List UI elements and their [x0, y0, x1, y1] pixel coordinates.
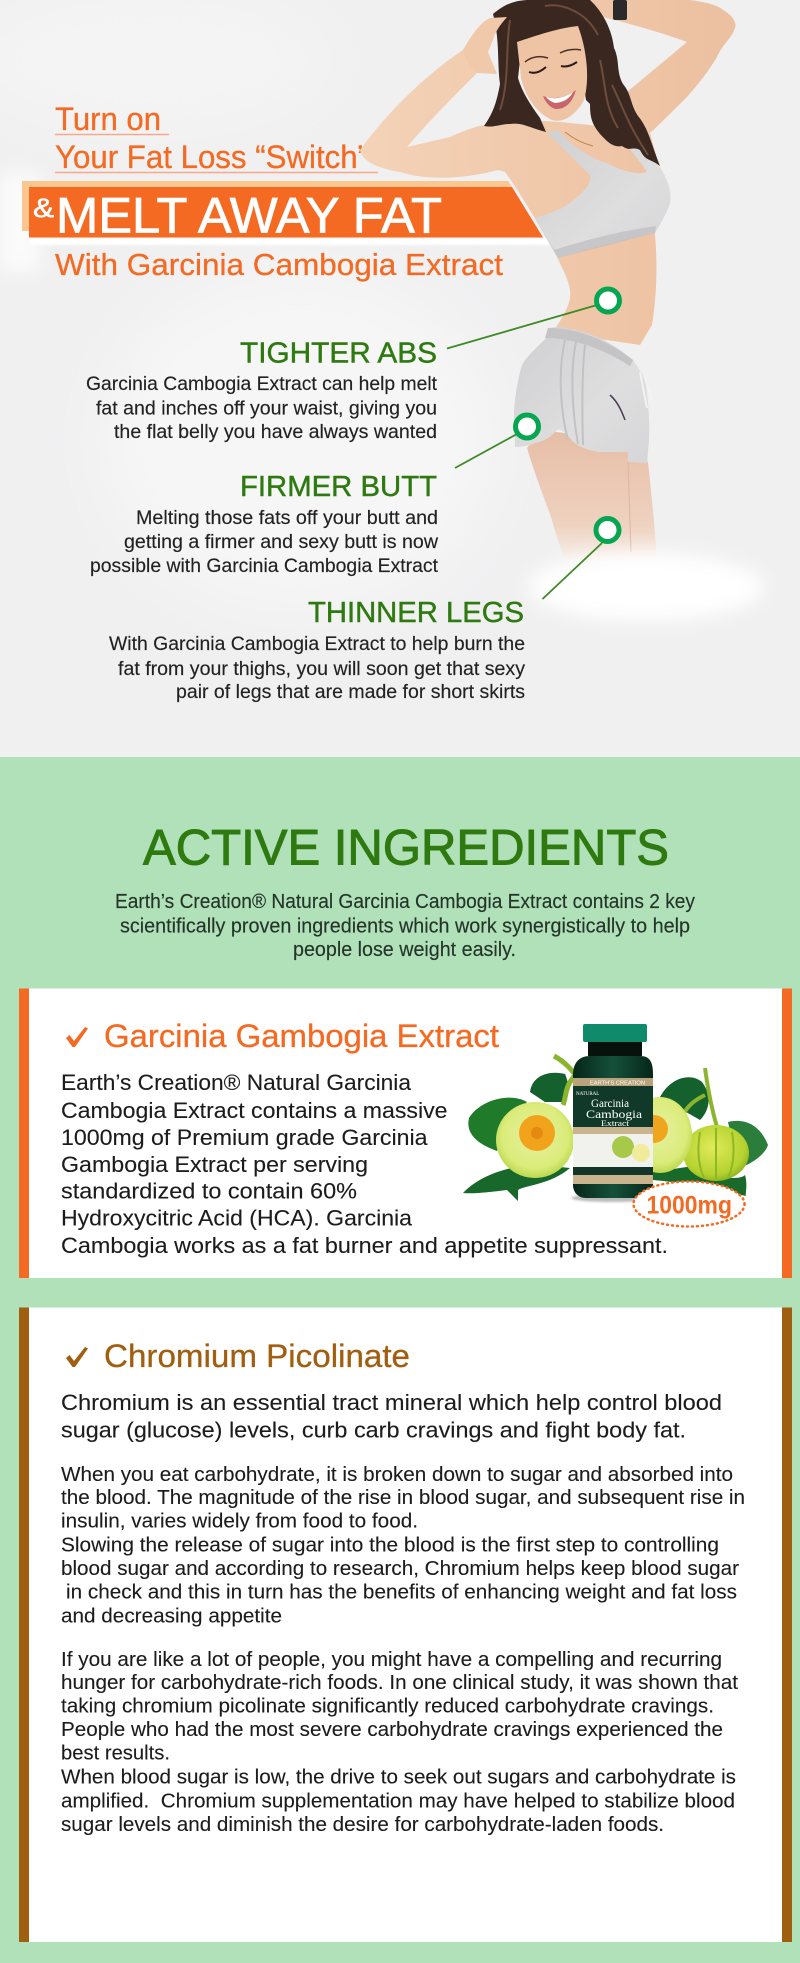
far arm	[583, 0, 735, 133]
lead text: sugar (glucose) levels, curb carb cravings and fight body fat.	[61, 1418, 686, 1442]
paragraph one: When you eat carbohydrate, it is broken down to sugar and absorbed into	[61, 1464, 733, 1486]
leaves	[463, 1073, 768, 1201]
panel: garcinia card	[19, 988, 792, 1278]
paragraph one: and decreasing appetite	[61, 1606, 282, 1628]
legs	[527, 430, 657, 562]
text: introduction: scientifically proven ingredients which work synergistically to help	[120, 916, 690, 938]
title: headline text: Turn on	[55, 101, 161, 137]
hair	[484, 0, 660, 166]
illustration: product bottle with fruit	[463, 1024, 768, 1226]
paragraph two	[61, 1649, 738, 1836]
hand in hair	[463, 17, 507, 74]
paragraph two: best results.	[61, 1742, 170, 1764]
bottle: EARTH’S CREATION	[590, 1080, 645, 1086]
whole fruit	[683, 1125, 749, 1181]
section: benefit thinner legs: With Garcinia Cambogia Extract to help burn the	[109, 633, 525, 655]
decoration: white glow under legs	[528, 553, 764, 621]
icon: check mark	[66, 1027, 88, 1047]
card body text: Earth’s Creation® Natural Garcinia	[61, 1070, 411, 1095]
section: benefit tighter abs: Garcinia Cambogia Extract can help melt	[86, 373, 438, 395]
shorts	[514, 327, 649, 463]
text: introduction: people lose weight easily.	[293, 939, 516, 961]
illustration: woman figure	[360, 0, 735, 562]
icon: check mark	[66, 1347, 88, 1367]
paragraph one	[61, 1464, 745, 1628]
section: benefit tighter abs: fat and inches off your waist, giving you	[96, 398, 437, 420]
lead text: Chromium is an essential tract mineral which help control blood	[61, 1390, 722, 1415]
card body text: 1000mg of Premium grade Garcinia	[61, 1125, 428, 1150]
callout: legs marker	[542, 518, 619, 599]
card body text: standardized to contain 60%	[61, 1178, 357, 1204]
section: benefit firmer butt: Melting those fats off your butt and	[136, 507, 438, 529]
section: benefit tighter abs: TIGHTER ABS	[240, 338, 437, 370]
lead text	[61, 1390, 722, 1442]
card body text: Hydroxycitric Acid (HCA). Garcinia	[61, 1206, 412, 1230]
necklace	[565, 132, 593, 146]
card body text: Gambogia Extract per serving	[61, 1152, 368, 1177]
callout: abs marker	[447, 289, 620, 348]
text: introduction	[115, 891, 695, 961]
section: benefit firmer butt: FIRMER BUTT	[240, 471, 437, 503]
section: benefit thinner legs: pair of legs that are made for short skirts	[176, 681, 525, 703]
panel: active ingredients background	[0, 757, 800, 1963]
paragraph two: People who had the most severe carbohydrate cravings experienced the	[61, 1719, 723, 1741]
paragraph one: Slowing the release of sugar into the blood is the first step to controlling	[61, 1534, 719, 1556]
banner: orange highlight band	[22, 181, 543, 238]
card heading: Chromium Picolinate	[104, 1338, 410, 1374]
bottle: Cambogia	[586, 1107, 643, 1121]
paragraph one: in check and this in turn has the benefits of enhancing weight and fat loss	[66, 1582, 737, 1604]
callout: butt marker	[455, 415, 538, 468]
section: benefit firmer butt: possible with Garcinia Cambogia Extract	[90, 555, 439, 577]
paragraph two: taking chromium picolinate significantly reduced carbohydrate cravings.	[61, 1696, 714, 1718]
face	[517, 26, 587, 121]
paragraph one: insulin, varies widely from food to food.	[61, 1510, 418, 1532]
right cut fruit	[628, 1097, 692, 1173]
bottle	[571, 1024, 655, 1202]
bra top	[535, 130, 671, 258]
left cut fruit	[496, 1102, 574, 1178]
bottle: NATURAL	[576, 1092, 599, 1097]
paragraph two: If you are like a lot of people, you might have a compelling and recurring	[61, 1649, 722, 1671]
paragraph one: the blood. The magnitude of the rise in blood sugar, and subsequent rise in	[61, 1487, 745, 1509]
paragraph two: sugar levels and diminish the desire for carbohydrate-laden foods.	[61, 1814, 664, 1836]
card body text: Cambogia works as a fat burner and appetite suppressant.	[61, 1233, 668, 1258]
card heading: Garcinia Gambogia Extract	[104, 1018, 499, 1054]
bottle: Extract	[601, 1119, 630, 1128]
paragraph one: blood sugar and according to research, Chromium helps keep blood sugar	[61, 1558, 739, 1580]
title: headline text	[33, 101, 503, 282]
heading: active ingredients: ACTIVE INGREDIENTS	[143, 820, 669, 876]
card body text: Cambogia Extract contains a massive	[61, 1098, 448, 1123]
card body text	[61, 1070, 668, 1258]
title: headline text: Your Fat Loss “Switch”	[55, 139, 368, 175]
paragraph two: When blood sugar is low, the drive to seek out sugars and carbohydrate is	[61, 1766, 736, 1788]
panel: chromium card	[19, 1308, 792, 1942]
bottle: Garcinia	[591, 1096, 630, 1110]
paragraph two: hunger for carbohydrate-rich foods. In one clinical study, it was shown that	[61, 1672, 738, 1694]
section: benefit thinner legs: fat from your thighs, you will soon get that sexy	[118, 658, 525, 680]
torso and near arm	[360, 50, 660, 345]
section: benefit firmer butt: getting a firmer and sexy butt is now	[124, 531, 439, 553]
section: benefit tighter abs	[86, 338, 438, 443]
title: headline text: &	[33, 193, 54, 223]
stems	[554, 1056, 575, 1105]
section: benefit firmer butt	[90, 471, 439, 577]
section: benefit thinner legs: THINNER LEGS	[308, 597, 524, 629]
title: headline text: With Garcinia Cambogia Extract	[55, 247, 503, 282]
title: headline text: MELT AWAY FAT	[56, 188, 442, 244]
paragraph two: amplified. Chromium supplementation may have helped to stabilize blood	[61, 1790, 735, 1812]
watch	[613, 0, 627, 20]
section: benefit tighter abs: the flat belly you have always wanted	[114, 421, 437, 443]
badge: 1000mg: 1000mg	[646, 1192, 732, 1220]
text: introduction: Earth’s Creation® Natural Garcinia Cambogia Extract contains 2 key	[115, 891, 695, 913]
badge: 1000mg	[634, 1182, 744, 1226]
section: benefit thinner legs	[109, 597, 525, 703]
panel: hero background	[0, 0, 800, 757]
